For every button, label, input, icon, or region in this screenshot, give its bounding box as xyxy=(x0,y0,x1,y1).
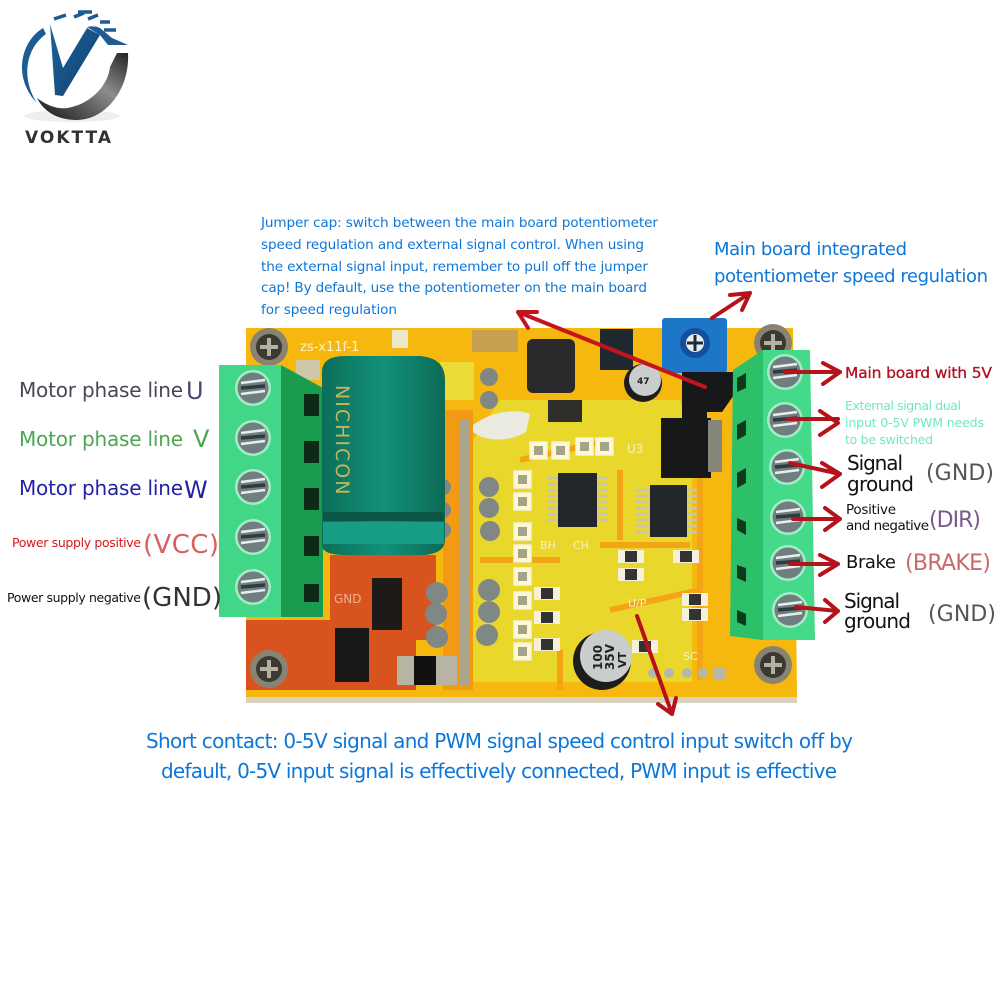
top IC xyxy=(600,329,633,370)
label DIR: Positive xyxy=(846,502,896,518)
terminal slots xyxy=(304,394,319,602)
label DIR: and negative xyxy=(846,518,929,534)
board shadow edge xyxy=(246,695,797,703)
logo mosaic dots xyxy=(54,12,116,43)
logo ring xyxy=(22,28,46,103)
label brake: (BRAKE) xyxy=(905,551,991,576)
potentiometer callout: Main board integrated xyxy=(714,239,907,260)
label VCC xyxy=(12,530,219,560)
header pin row xyxy=(648,668,725,679)
label VCC: (VCC) xyxy=(143,530,219,560)
terminal slots xyxy=(737,373,746,626)
ic 1 pins xyxy=(547,478,607,520)
label signal ground 2: ground xyxy=(844,609,911,633)
label external signal: to be switched xyxy=(845,432,933,447)
jumper callout: cap! By default, use the potentiometer on the main board xyxy=(261,280,647,296)
small capacitor 47 xyxy=(624,364,662,402)
left terminal block xyxy=(219,365,323,617)
potentiometer callout: potentiometer speed regulation xyxy=(714,266,988,287)
label GND xyxy=(7,583,222,613)
orange copper pad xyxy=(246,555,436,690)
diode D11 xyxy=(335,628,369,682)
label external signal: External signal dual xyxy=(845,398,961,413)
terminal side xyxy=(730,350,763,640)
label signal ground 2 xyxy=(844,589,996,633)
potentiometer callout xyxy=(714,239,988,287)
top pads xyxy=(296,330,518,380)
capacitor marking: NICHICON xyxy=(331,385,353,496)
label signal ground 1: Signal xyxy=(847,451,903,475)
label DIR: (DIR) xyxy=(929,508,981,533)
short contact callout: Short contact: 0-5V signal and PWM signal speed control input switch off by xyxy=(146,729,853,753)
arrow DIR xyxy=(793,508,840,530)
label brake: Brake xyxy=(846,552,896,573)
terminal front xyxy=(763,350,815,640)
terminal screws xyxy=(767,354,808,628)
arrow signal ground 1 xyxy=(790,463,840,487)
label signal ground 1 xyxy=(847,451,994,496)
ic 2 xyxy=(650,485,687,537)
arrow external xyxy=(788,411,838,435)
logo shadow xyxy=(24,110,120,122)
terminal screws xyxy=(235,370,271,605)
jumper callout: Jumper cap: switch between the main board potentiometer xyxy=(260,215,658,231)
small capacitor 47: 47 xyxy=(637,377,650,387)
large capacitor xyxy=(322,356,445,555)
label signal ground 1: (GND) xyxy=(926,461,994,486)
label external signal xyxy=(845,398,984,447)
label signal ground 2: Signal xyxy=(844,589,900,613)
label GND: Power supply negative xyxy=(7,590,141,605)
short contact callout: default, 0-5V input signal is effectively connected, PWM input is effective xyxy=(161,759,837,783)
heat sink line xyxy=(460,420,470,685)
arrow signal ground 2 xyxy=(796,600,838,622)
label U: U xyxy=(186,377,204,405)
capacitor 100 35V: VT xyxy=(616,651,629,668)
arrow brake xyxy=(790,555,838,575)
inductor xyxy=(527,339,575,393)
label signal ground 2: (GND) xyxy=(928,602,996,627)
jumper callout: for speed regulation xyxy=(261,302,397,318)
label V: Motor phase line xyxy=(19,427,183,451)
header block xyxy=(661,418,711,478)
terminal side xyxy=(281,365,323,617)
board base xyxy=(246,328,797,697)
arrow to jumper text xyxy=(518,312,705,387)
arrow to short contact text xyxy=(637,616,676,714)
jumper and header xyxy=(661,372,736,478)
label DIR xyxy=(846,502,981,534)
board yellow area xyxy=(473,400,692,682)
resistor R002 xyxy=(397,656,457,685)
arrow main 5V xyxy=(785,363,840,384)
red arrows xyxy=(518,293,840,714)
terminal front xyxy=(219,365,281,617)
silkscreen labels xyxy=(540,442,698,663)
logo blue arc xyxy=(87,26,128,45)
label VCC: Power supply positive xyxy=(12,535,141,550)
right terminal block xyxy=(730,350,815,640)
silkscreen labels: CH xyxy=(573,539,589,552)
capacitor 100 35V xyxy=(573,630,632,690)
ic 2 pins xyxy=(636,490,697,532)
label external signal: input 0-5V PWM needs xyxy=(845,415,984,430)
logo V letter xyxy=(50,24,100,96)
short contact callout xyxy=(146,729,853,783)
logo: Voktta xyxy=(22,12,128,148)
pads column xyxy=(514,438,613,660)
label V: V xyxy=(193,425,210,453)
silkscreen labels: U/P xyxy=(628,597,647,610)
board label: zs-x11f-1 xyxy=(300,340,359,355)
silkscreen labels: SC xyxy=(683,650,698,663)
silkscreen labels: BH xyxy=(540,539,556,552)
diode R20 xyxy=(372,578,402,630)
jumper callout: speed regulation and external signal control. When using xyxy=(261,237,644,253)
logo gray swoosh xyxy=(37,53,128,120)
capacitor 100 35V: 35V xyxy=(603,643,617,670)
jumper cap xyxy=(682,372,736,412)
silkscreen labels: U3 xyxy=(627,442,643,456)
label GND: (GND) xyxy=(142,583,222,613)
dark diodes xyxy=(335,578,457,685)
orange traces xyxy=(480,440,700,690)
label W: W xyxy=(184,476,208,504)
label brake xyxy=(846,551,991,576)
right labels xyxy=(844,364,996,633)
white blob xyxy=(473,411,530,440)
jumper callout xyxy=(260,215,658,318)
arrow to potentiometer text xyxy=(712,293,750,318)
resistors small xyxy=(534,550,708,653)
pcb board xyxy=(219,318,815,703)
label W: Motor phase line xyxy=(19,476,183,500)
board screws xyxy=(250,324,792,688)
label 5V: Main board with 5V xyxy=(845,364,992,382)
logo wordmark: VOKTTA xyxy=(25,128,112,148)
yellow glow under capacitor xyxy=(440,362,474,400)
jumper callout: the external signal input, remember to pull off the jumper xyxy=(261,259,648,275)
GND silkscreen: GND xyxy=(334,592,362,606)
orange strip xyxy=(443,410,473,690)
ic 1 xyxy=(558,473,597,527)
label signal ground 1: ground xyxy=(847,472,914,496)
capacitor 100 35V: 100 xyxy=(591,645,605,670)
potentiometer xyxy=(662,318,727,373)
small diode xyxy=(548,400,582,422)
label U: Motor phase line xyxy=(19,378,183,402)
solder joints xyxy=(425,368,500,648)
left labels xyxy=(7,377,222,613)
